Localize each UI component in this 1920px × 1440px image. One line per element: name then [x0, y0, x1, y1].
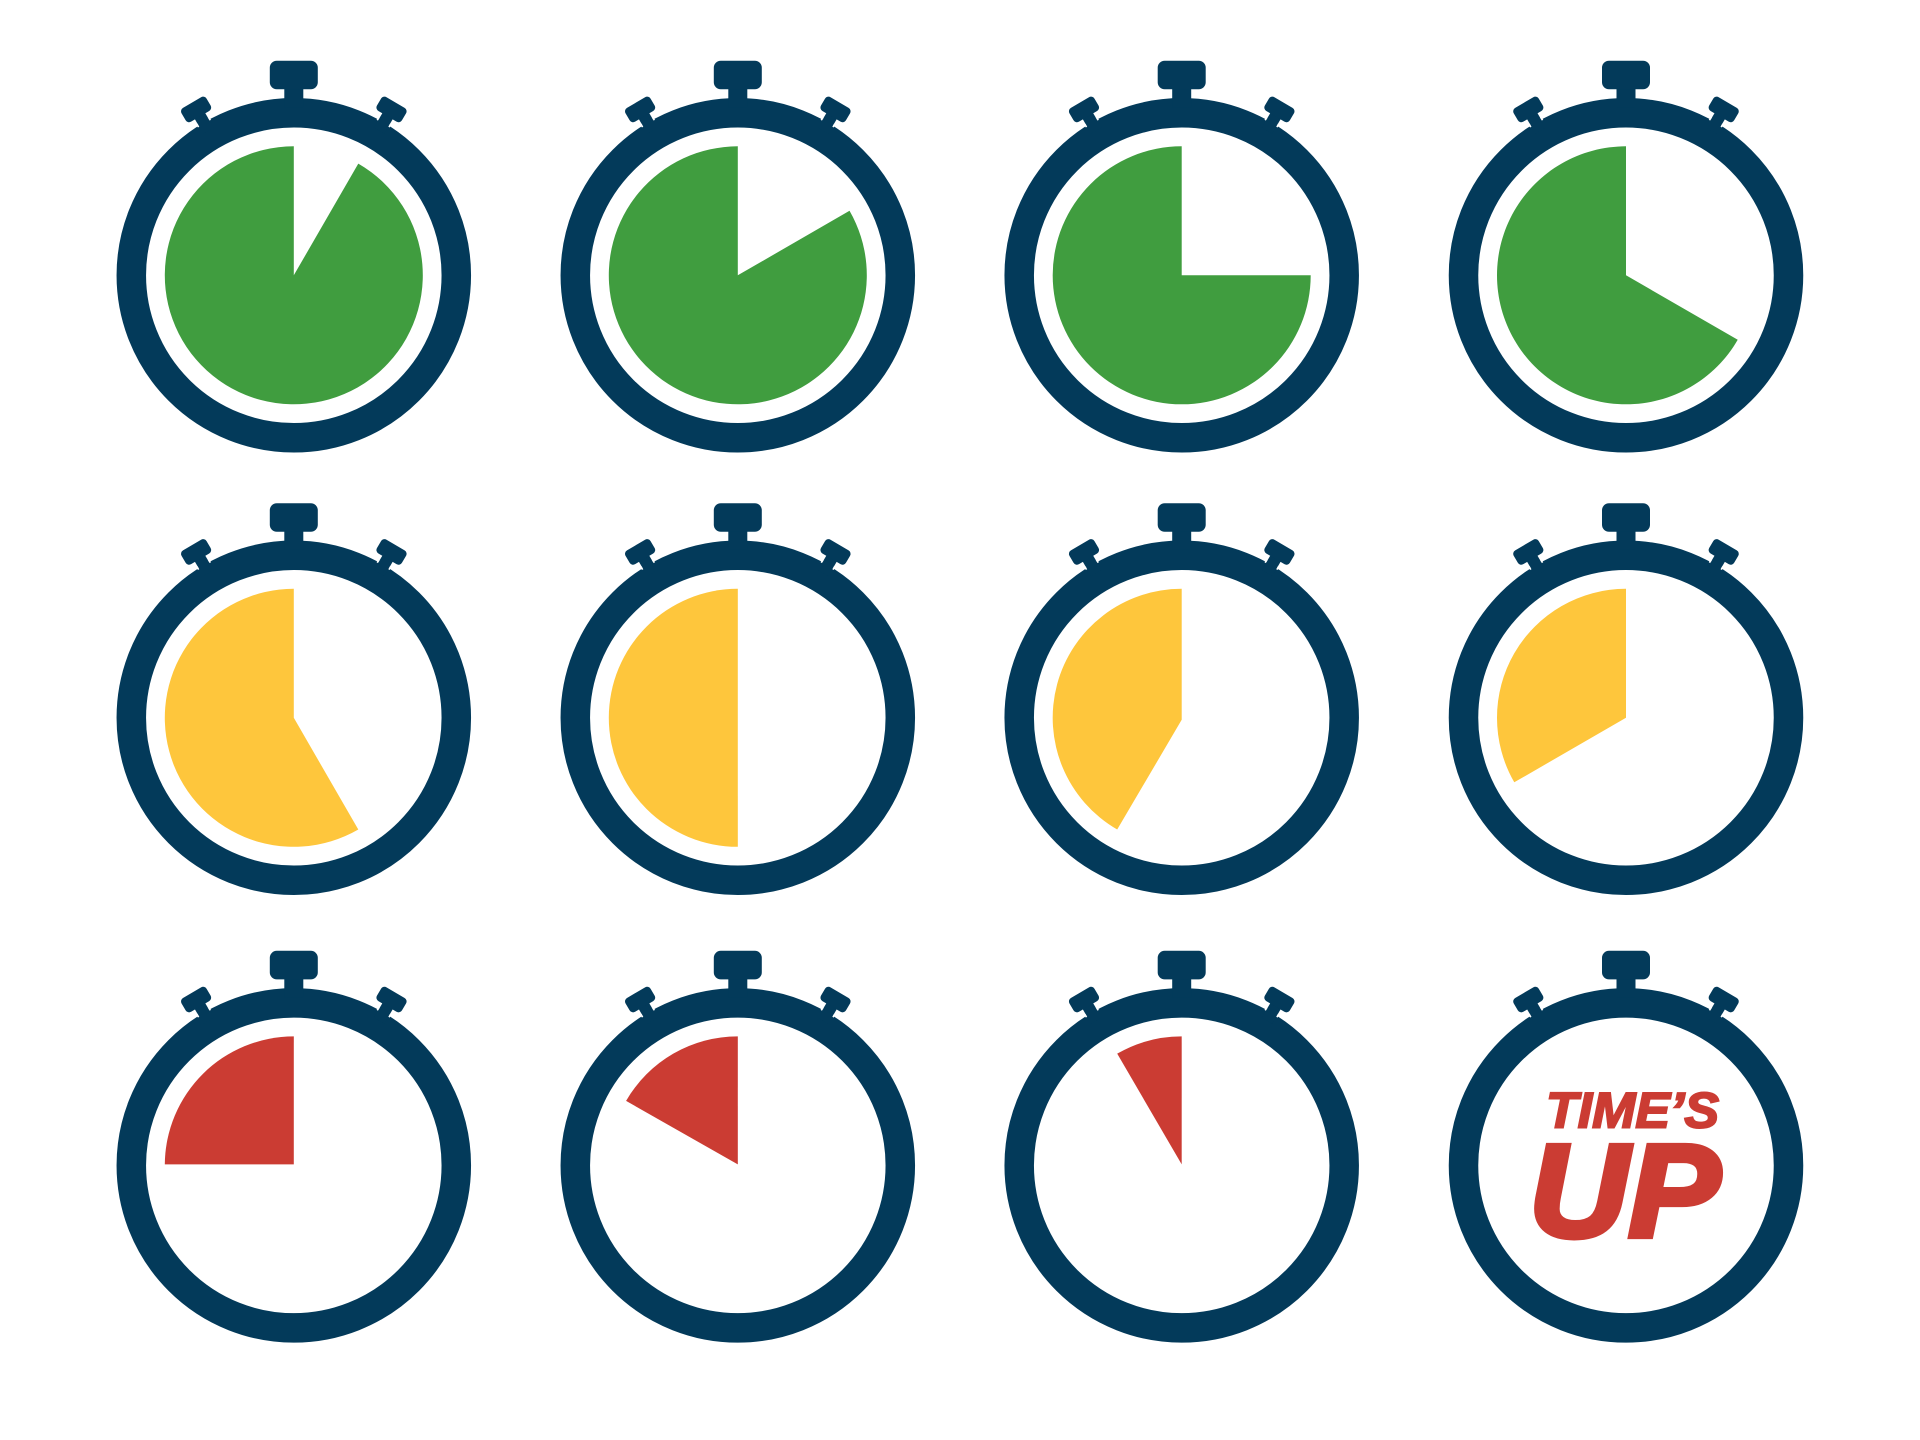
stopwatch 4: green, 120 degrees elapsed — [1464, 61, 1788, 438]
stopwatch 10: red, 300 degrees elapsed — [575, 951, 900, 1328]
stopwatch 9: red, 270 degrees elapsed — [131, 951, 456, 1328]
text: TIME'S: TIME’S — [1546, 1083, 1719, 1139]
stopwatch 5: yellow, 150 degrees elapsed — [131, 503, 456, 880]
stopwatch 1: green, 30 degrees elapsed — [131, 61, 456, 438]
stopwatch 7: yellow, 210 degrees elapsed — [1019, 503, 1344, 880]
stopwatch 2: green, 60 degrees elapsed — [575, 61, 900, 438]
stopwatch 3: green, 90 degrees elapsed — [1019, 61, 1344, 438]
stopwatch 12: time's up — [1464, 951, 1788, 1328]
stopwatch 8: yellow, 240 degrees elapsed — [1464, 503, 1788, 880]
stopwatch 11: red, 330 degrees elapsed — [1019, 951, 1344, 1328]
text: UP: UP — [1529, 1117, 1721, 1264]
stopwatch 6: yellow, 180 degrees elapsed — [575, 503, 900, 880]
